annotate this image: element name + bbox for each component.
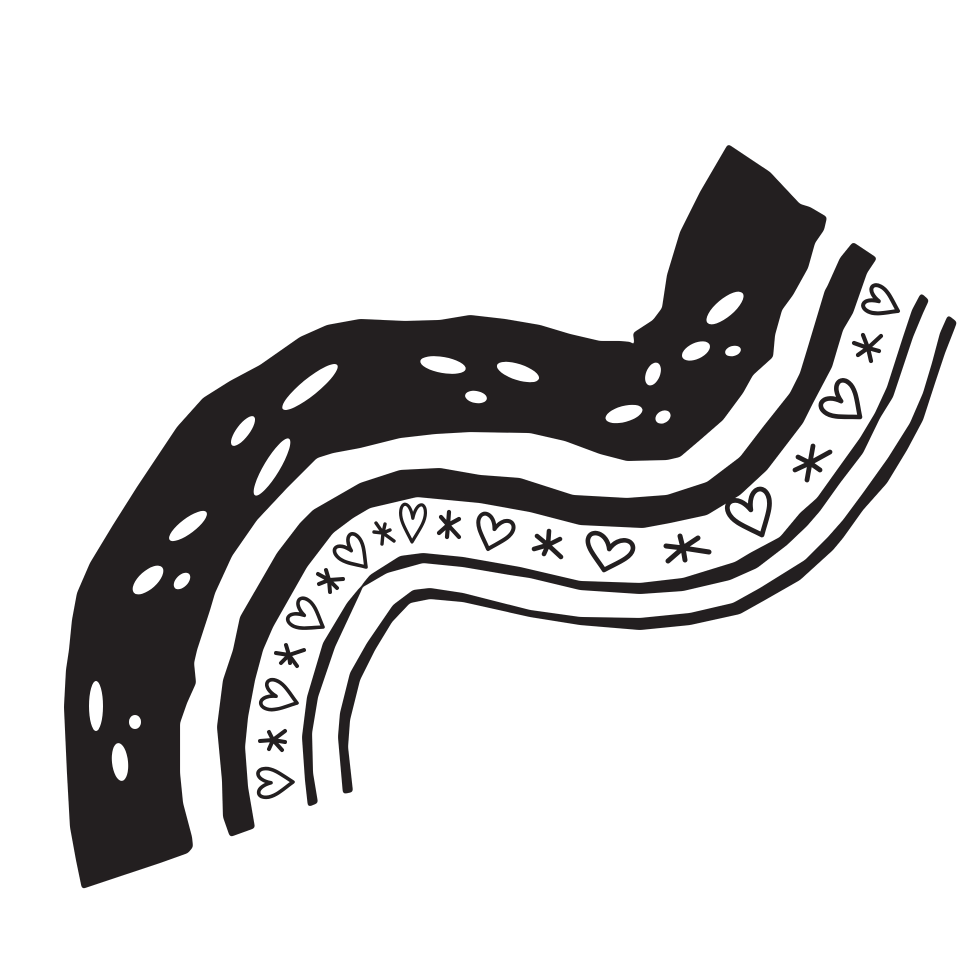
asterisk 1: [854, 335, 881, 361]
heart 8: [286, 596, 331, 640]
asterisk 8: [276, 645, 304, 666]
band body: [64, 144, 827, 889]
heart 4: [582, 531, 635, 576]
heart 9: [259, 678, 302, 717]
second black stripe: [217, 242, 877, 837]
asterisk 9: [260, 731, 285, 750]
asterisk 4: [534, 531, 561, 557]
heart 2: [818, 377, 872, 432]
wide black band with holes: [64, 144, 827, 889]
heart 3: [725, 487, 782, 544]
fourth thin stripe: [338, 315, 957, 794]
asterisk 7: [318, 570, 343, 592]
heart 10: [258, 768, 294, 798]
heart 7: [332, 532, 377, 577]
holes in band: [89, 286, 748, 782]
asterisk 2: [795, 446, 830, 480]
hearts row: [258, 283, 904, 798]
heart 1: [861, 283, 904, 323]
heart 5: [471, 512, 515, 555]
asterisk 3: [666, 536, 709, 561]
heart 6: [400, 504, 426, 542]
asterisks row: [260, 335, 881, 750]
asterisk 6: [374, 523, 394, 544]
third thin stripe: [302, 293, 929, 807]
asterisk 5: [439, 512, 459, 537]
